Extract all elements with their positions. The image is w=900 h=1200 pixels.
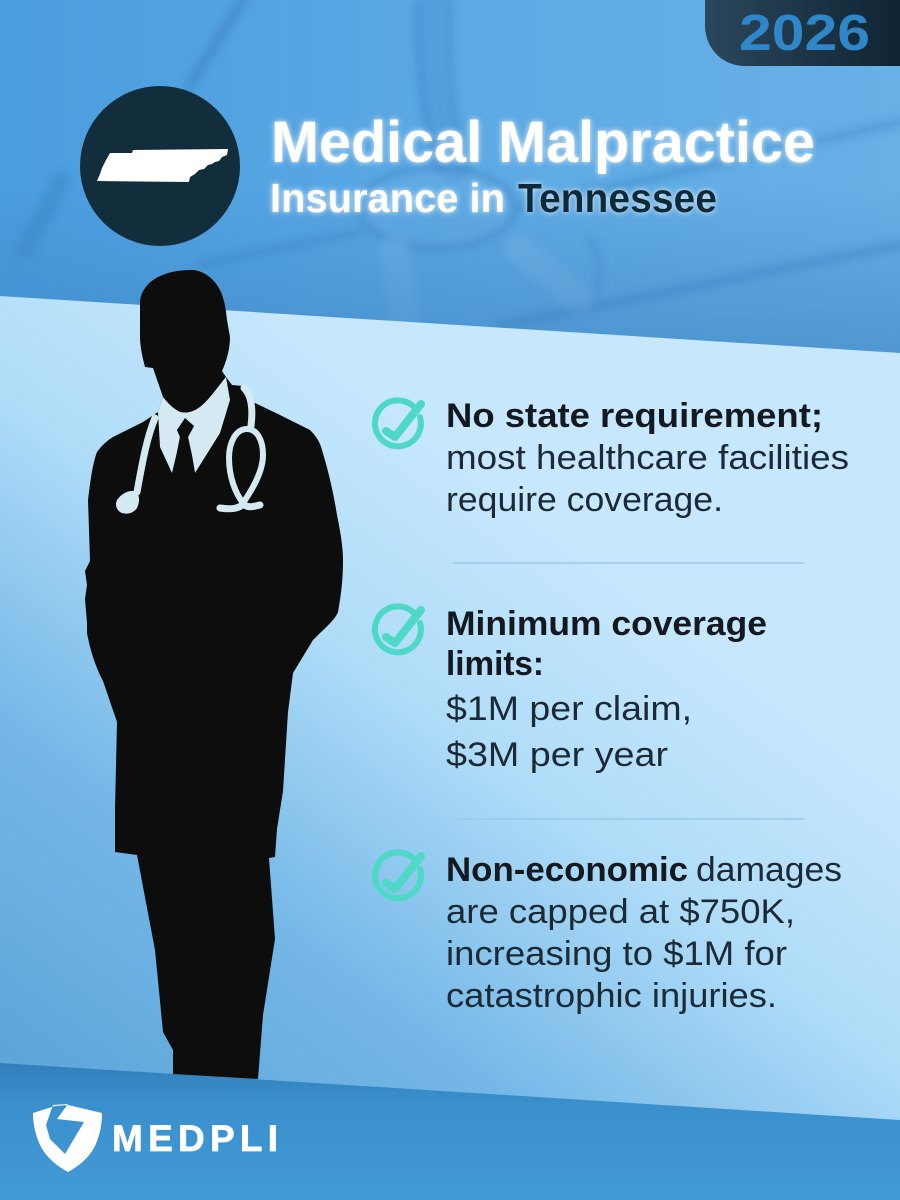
panel: light blue content area [0,296,900,1122]
title [270,110,815,221]
text: damages [696,851,842,889]
text: limits: [446,645,544,683]
wordmark: MEDPLI [112,1118,278,1159]
logo: MEDPLI [33,1104,278,1172]
text: Minimum coverage [446,605,767,643]
state shape [97,149,228,182]
item 2 [375,605,767,774]
text [446,397,849,519]
doctor silhouette [85,270,343,1079]
title line 2: Insurance in [270,175,505,221]
text: require coverage. [446,481,723,519]
title line 1: Medical Malpractice [271,110,815,175]
item 1 [375,397,849,519]
text: $1M per claim, [446,690,692,728]
shirt collar [158,377,230,473]
item 3 [375,851,842,1015]
text: No state requirement; [446,397,823,435]
necktie [173,418,195,473]
text [446,851,842,1015]
title line 2: Tennessee [518,175,717,221]
text: Non-economic [446,851,688,889]
stethoscope [116,388,263,514]
year tab [705,0,900,66]
background: blurred stethoscope header [0,0,900,360]
icon: Tennessee state badge [80,86,240,246]
icon: check [375,606,421,652]
icon: shield [33,1104,102,1172]
text: catastrophic injuries. [446,977,777,1015]
icon: check [375,400,421,446]
text: most healthcare facilities [446,439,849,477]
year label: 2026 [739,4,870,61]
footer band [0,1063,900,1200]
text: $3M per year [446,736,668,774]
text: increasing to $1M for [446,935,787,973]
icon: check [375,852,421,898]
text [446,605,767,774]
text: are capped at $750K, [446,893,795,931]
title line 2 [270,175,717,221]
